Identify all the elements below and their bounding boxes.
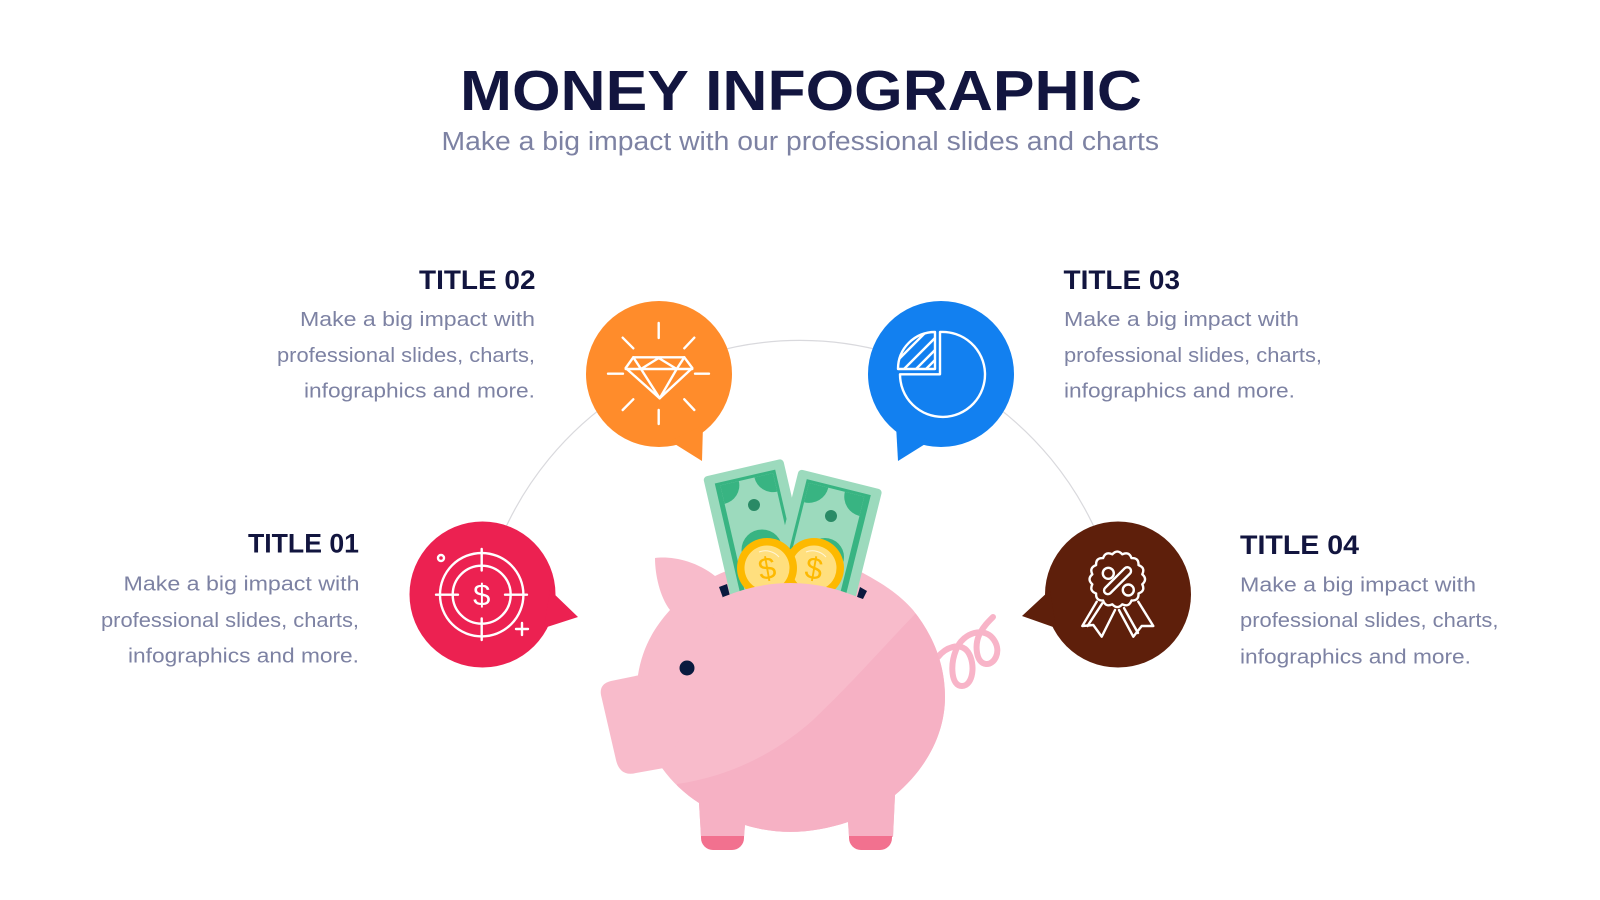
text block: title 02: professional slides, charts, [277, 344, 535, 367]
text block: title 02: infographics and more. [304, 380, 535, 403]
piggy bank illustration [600, 459, 1000, 850]
pig body [638, 558, 945, 837]
text block: title 01: Make a big impact with [124, 572, 360, 595]
right coin: $ [802, 550, 825, 587]
subtitle: Make a big impact with our professional slides and charts [442, 128, 1159, 156]
pig snout [601, 675, 690, 774]
icon: target with dollar [436, 549, 528, 640]
text block: title 01 [101, 528, 360, 668]
icon: discount ribbon badge [1082, 552, 1153, 637]
bubble: red target [410, 522, 578, 668]
pig hooves [701, 836, 892, 850]
left banknote marks [742, 499, 782, 570]
pig front lip [700, 583, 880, 640]
text block: title 01: infographics and more. [128, 645, 359, 668]
left coin: $ [756, 550, 779, 587]
text block: title 02: Make a big impact with [300, 308, 535, 331]
left banknote [704, 459, 792, 594]
right coin [784, 538, 844, 598]
right banknote marks [806, 510, 844, 576]
text block: title 03: infographics and more. [1064, 380, 1295, 403]
title: MONEY INFOGRAPHIC [460, 59, 1142, 123]
text block: title 01: TITLE 01 [248, 528, 359, 558]
icon: diamond with rays [608, 323, 709, 424]
icon: pie chart [896, 330, 986, 418]
text block: title 03 [1064, 265, 1322, 403]
text block: title 04: infographics and more. [1240, 646, 1471, 668]
coin slot [719, 584, 867, 599]
bubble: blue pie chart [868, 301, 1014, 461]
pig eye [680, 660, 694, 676]
bubble: orange diamond [586, 301, 732, 461]
icon: target with dollar: $ [473, 578, 490, 612]
text block: title 04 [1240, 530, 1498, 668]
text block: title 04: TITLE 04 [1240, 530, 1359, 560]
text block: title 02: TITLE 02 [419, 265, 536, 295]
text block: title 02 [277, 265, 536, 403]
text block: title 01: professional slides, charts, [101, 609, 359, 632]
connecting arc [501, 340, 1099, 538]
text block: title 03: TITLE 03 [1064, 265, 1180, 295]
bubble: brown ribbon [1022, 522, 1191, 668]
text block: title 04: Make a big impact with [1240, 574, 1476, 596]
right banknote [785, 470, 882, 596]
text block: title 03: professional slides, charts, [1064, 344, 1322, 367]
pig tail [938, 617, 997, 686]
left coin [737, 538, 797, 598]
text block: title 04: professional slides, charts, [1240, 609, 1498, 632]
text block: title 03: Make a big impact with [1064, 308, 1299, 331]
